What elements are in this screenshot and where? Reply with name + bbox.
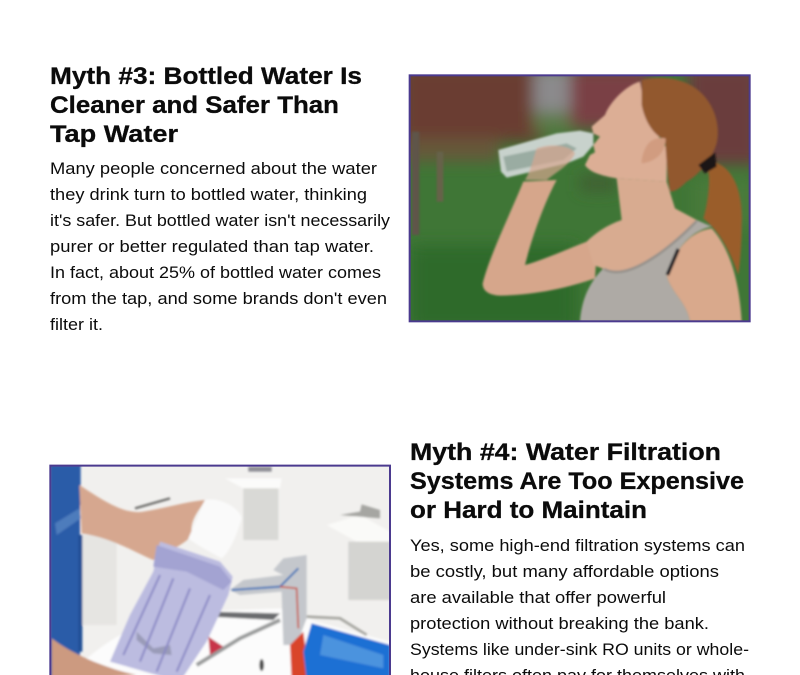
text block: myth 3 body: Many people concerned about the water bbox=[50, 160, 378, 178]
text block: myth 3 body bbox=[50, 160, 391, 334]
text block: myth 3 body: from the tap, and some brands don't even bbox=[50, 290, 387, 308]
text block: myth 4 body: Yes, some high-end filtration systems can bbox=[410, 537, 745, 555]
heading: myth 3: Myth #3: Bottled Water Is bbox=[50, 63, 362, 90]
heading: myth 4 bbox=[410, 439, 744, 524]
text block: myth 3 body: they drink turn to bottled water, thinking bbox=[50, 186, 367, 204]
text block: myth 3 body: filter it. bbox=[50, 316, 103, 334]
heading: myth 3 bbox=[50, 63, 362, 148]
heading: myth 3: Cleaner and Safer Than bbox=[50, 92, 339, 119]
text block: myth 3 body: In fact, about 25% of bottled water comes bbox=[50, 264, 381, 282]
photo: woman drinking bottled water bbox=[408, 74, 751, 322]
text block: myth 4 body: Systems like under-sink RO units or whole- bbox=[410, 641, 749, 659]
heading: myth 4: or Hard to Maintain bbox=[410, 497, 647, 524]
heading: myth 4: Systems Are Too Expensive bbox=[410, 468, 744, 495]
heading: myth 3: Tap Water bbox=[50, 121, 178, 148]
text block: myth 4 body bbox=[410, 537, 749, 675]
text block: myth 4 body: are available that offer powerful bbox=[410, 589, 666, 607]
text block: myth 3 body: purer or better regulated than tap water. bbox=[50, 238, 374, 256]
text block: myth 4 body: be costly, but many affordable options bbox=[410, 563, 719, 581]
text block: myth 4 body: protection without breaking the bank. bbox=[410, 615, 709, 633]
photo: technician changing water filter bbox=[50, 465, 391, 675]
arm drawn first so the torso overlaps it bbox=[483, 180, 597, 296]
heading: myth 4: Myth #4: Water Filtration bbox=[410, 439, 721, 466]
text block: myth 3 body: it's safer. But bottled water isn't necessarily bbox=[50, 212, 391, 230]
